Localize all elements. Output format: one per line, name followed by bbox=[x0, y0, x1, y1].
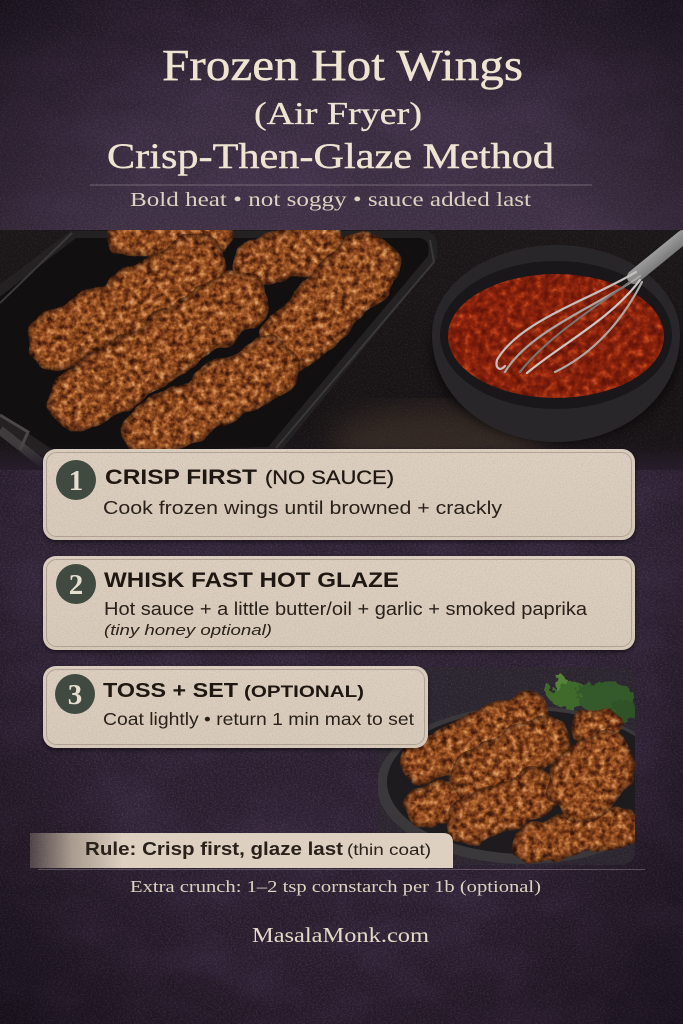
step number 2: 2 bbox=[69, 569, 83, 601]
subtitle: air fryer: (Air Fryer) bbox=[254, 95, 422, 131]
step 1 text: Cook frozen wings until browned + crackly bbox=[103, 497, 503, 518]
rule banner: Rule: Crisp first, glaze last bbox=[85, 839, 343, 859]
step number 3: 3 bbox=[68, 679, 82, 711]
step 1 heading: (NO SAUCE) bbox=[265, 468, 394, 489]
plated wings bbox=[424, 714, 622, 843]
step number 3 bbox=[55, 674, 95, 714]
photo: wings in air fryer basket and glaze bowl bbox=[0, 230, 683, 475]
panel: step 2 bbox=[43, 556, 635, 650]
step number 1: 1 bbox=[69, 465, 83, 497]
glaze bowl bbox=[432, 245, 680, 442]
step 3 heading: (OPTIONAL) bbox=[244, 682, 364, 701]
wings in basket bbox=[58, 236, 366, 430]
air fryer basket bbox=[0, 231, 438, 472]
step number 1 bbox=[56, 460, 96, 500]
photo: finished wings on plate bbox=[378, 667, 635, 865]
step 2 note: (tiny honey optional) bbox=[104, 622, 272, 639]
step 1 heading: CRISP FIRST bbox=[105, 466, 257, 489]
plate bbox=[378, 707, 635, 864]
panel: step 3 bbox=[43, 666, 428, 748]
step 3 text: Coat lightly • return 1 min max to set bbox=[103, 709, 414, 729]
step number 2 bbox=[56, 564, 96, 604]
tagline: Bold heat • not soggy • sauce added last bbox=[130, 189, 532, 211]
rule banner bbox=[30, 833, 453, 868]
step 2 heading: WHISK FAST HOT GLAZE bbox=[104, 569, 399, 592]
header bbox=[107, 41, 554, 211]
whisk bbox=[497, 237, 683, 373]
rule banner: (thin coat) bbox=[347, 842, 431, 859]
website credit: MasalaMonk.com bbox=[252, 923, 429, 947]
step 3 heading: TOSS + SET bbox=[103, 680, 238, 702]
parsley bbox=[548, 675, 639, 723]
title: Frozen Hot Wings bbox=[162, 41, 523, 90]
step 2 text: Hot sauce + a little butter/oil + garlic + smoked paprika bbox=[104, 598, 588, 619]
subtitle: method: Crisp-Then-Glaze Method bbox=[107, 136, 554, 176]
footnote: extra crunch: Extra crunch: 1–2 tsp cornstarch per 1b (optional) bbox=[130, 877, 541, 896]
panel: step 1 bbox=[43, 449, 635, 540]
